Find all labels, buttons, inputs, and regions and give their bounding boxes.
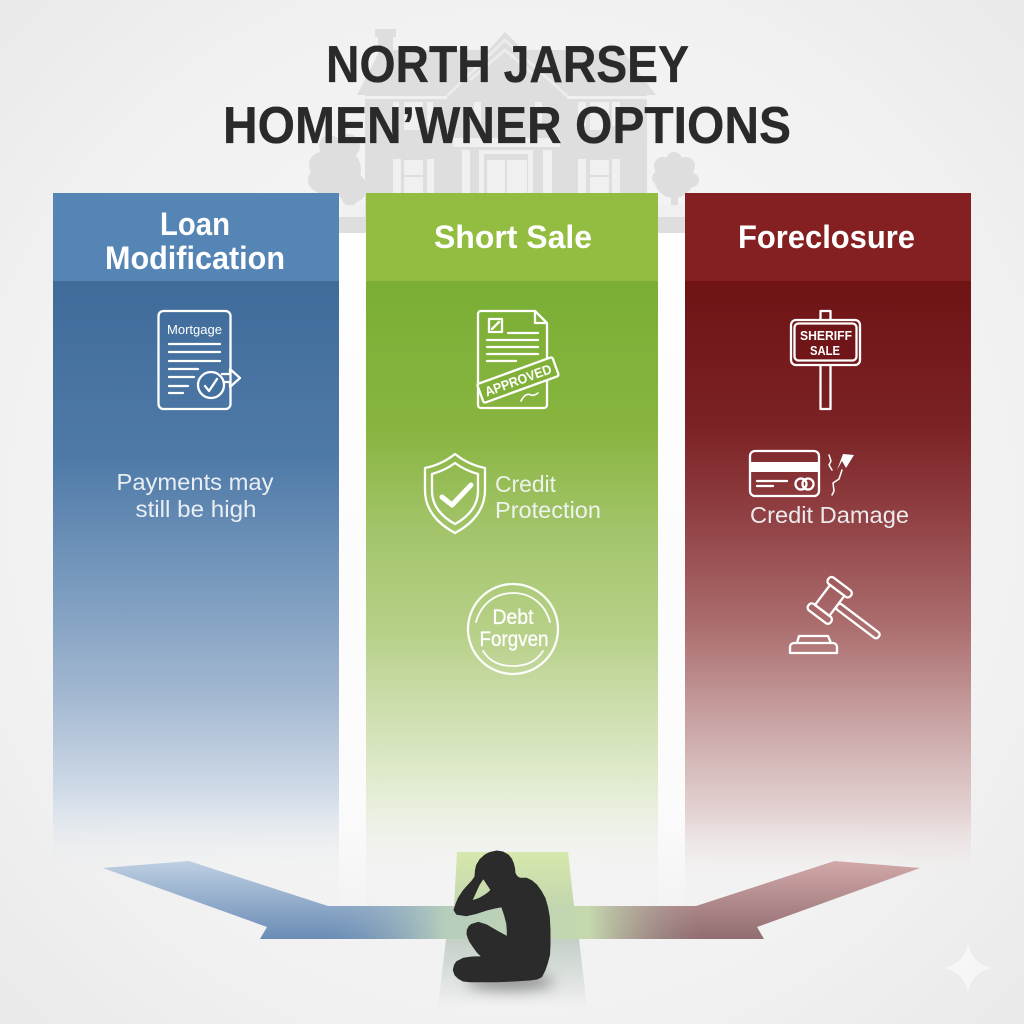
text: payments may still be high: Payments may xyxy=(116,469,274,495)
left arm toward loan modification xyxy=(103,861,446,939)
header band: loan modification xyxy=(53,193,339,281)
back path fading out xyxy=(438,939,587,1007)
icon: sheriff sale sign: SALE xyxy=(810,344,840,358)
icon: mortgage document xyxy=(158,311,240,409)
icon: debt forgiven seal xyxy=(468,584,558,674)
distressed person silhouette xyxy=(453,851,550,982)
icon: debt forgiven seal: Forgven xyxy=(480,628,548,651)
icon: mortgage document: Mortgage xyxy=(167,322,222,337)
icon: approved document xyxy=(477,311,559,408)
title xyxy=(223,36,791,155)
text: credit protection: Protection xyxy=(495,497,601,523)
text: credit damage: Credit Damage xyxy=(750,502,909,528)
person shadow xyxy=(466,974,554,990)
right arm toward foreclosure xyxy=(589,861,920,939)
icon: damaged credit card xyxy=(750,451,854,496)
panel: loan modification xyxy=(53,193,339,875)
title line 2: HOMEN’WNER OPTIONS xyxy=(223,97,791,155)
heading: loan modification: Modification xyxy=(105,240,285,276)
icon: debt forgiven seal: Debt xyxy=(492,606,534,629)
heading: short sale: Short Sale xyxy=(434,219,592,255)
white gutters between columns xyxy=(339,233,685,913)
crossroads arrow xyxy=(103,852,920,1007)
icon: shield with check xyxy=(425,454,485,533)
header band: short sale xyxy=(366,193,658,281)
icon: approved document: APPROVED xyxy=(483,361,554,399)
icon: sparkle watermark xyxy=(943,943,993,993)
header band: foreclosure xyxy=(685,193,971,281)
icon: sheriff sale sign: SHERIFF xyxy=(800,329,852,343)
text: payments may still be high: still be high xyxy=(136,496,256,522)
horizontal band xyxy=(330,906,700,939)
heading: loan modification: Loan xyxy=(160,206,230,242)
heading: foreclosure: Foreclosure xyxy=(738,219,915,255)
background house silhouette xyxy=(308,29,699,233)
text: credit protection: Credit xyxy=(495,471,557,497)
icon: sheriff sale sign xyxy=(791,311,860,409)
title line 1: NORTH JARSEY xyxy=(326,36,689,94)
icon: gavel xyxy=(790,576,891,653)
panel: short sale xyxy=(366,193,658,875)
panel: foreclosure xyxy=(685,193,971,885)
forward path toward short sale xyxy=(454,852,574,906)
